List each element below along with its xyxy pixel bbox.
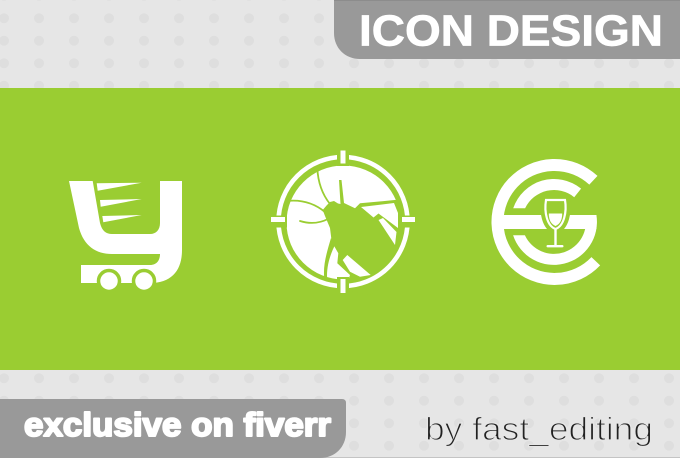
lower inner arc (513, 215, 597, 265)
outer ring (497, 165, 596, 279)
crosshair ring (278, 157, 408, 286)
author credit: by fast_editing (425, 411, 653, 447)
green band (0, 88, 680, 370)
upper inner arc (513, 179, 581, 208)
wine glass (545, 200, 566, 247)
wing highlights (361, 203, 398, 228)
white disc (286, 166, 400, 280)
heading: icon design: ICON DESIGN (359, 6, 663, 56)
cockroach legs (290, 168, 330, 223)
icon: shopping cart (69, 181, 182, 292)
icon: wine glass logo (497, 165, 597, 279)
center bar (498, 215, 596, 229)
crosshair ticks (268, 148, 418, 295)
cart wheels (98, 270, 154, 292)
top banner: icon design (334, 0, 680, 59)
cockroach silhouette (290, 168, 410, 295)
cart speed lines (97, 183, 142, 222)
banner text: exclusive on fiverr (24, 406, 331, 443)
bottom banner: exclusive on fiverr (0, 399, 346, 458)
icon: cockroach in crosshair (268, 148, 418, 295)
